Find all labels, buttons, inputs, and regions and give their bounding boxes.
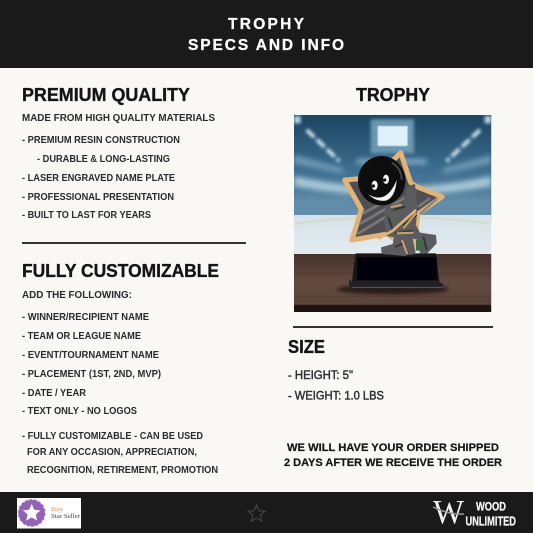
panel: size: [288, 337, 384, 402]
icon: purple badge: [19, 500, 45, 526]
customization list: - PLACEMENT (1ST, 2ND, MVP): [22, 369, 161, 380]
header title: TROPHY: [228, 16, 305, 33]
heading: size: SIZE: [288, 337, 325, 357]
customization list: - WINNER/RECIPIENT NAME: [22, 312, 149, 323]
icon: outlined star: [248, 505, 265, 521]
footer band: [0, 492, 533, 533]
usage note: FOR ANY OCCASION, APPRECIATION,: [27, 447, 197, 458]
star: [345, 153, 442, 252]
heading: premium quality: PREMIUM QUALITY: [22, 85, 190, 105]
heading: trophy: TROPHY: [356, 85, 430, 105]
trophy figure: [345, 153, 443, 288]
hockey player: [378, 184, 437, 256]
shipping notice: WE WILL HAVE YOUR ORDER SHIPPED: [287, 442, 499, 454]
badge text: [51, 506, 81, 520]
quality list: [22, 135, 180, 221]
wooden table: [294, 254, 491, 312]
quality list: - LASER ENGRAVED NAME PLATE: [22, 173, 175, 184]
header title: [188, 16, 344, 54]
logo wordmark: WOOD: [476, 500, 506, 514]
customization list: - TEAM OR LEAGUE NAME: [22, 331, 141, 342]
subheading: materials: MADE FROM HIGH QUALITY MATERIALS: [22, 113, 215, 124]
heading: fully customizable: FULLY CUSTOMIZABLE: [22, 261, 219, 281]
customization list: - TEXT ONLY - NO LOGOS: [22, 406, 137, 417]
height spec: - HEIGHT: 5": [288, 370, 353, 382]
quality list: - PREMIUM RESIN CONSTRUCTION: [22, 135, 180, 146]
quality list: - DURABLE & LONG-LASTING: [37, 154, 170, 165]
puck face: [358, 156, 405, 205]
quality list: - PROFESSIONAL PRESENTATION: [22, 192, 174, 203]
subheading: add the following: ADD THE FOLLOWING:: [22, 290, 132, 301]
wood unlimited logo: [433, 494, 516, 531]
weight spec: - WEIGHT: 1.0 LBS: [288, 390, 384, 402]
badge text: Star Seller: [51, 513, 81, 520]
header title: SPECS AND INFO: [188, 37, 344, 54]
etsy star seller badge: [17, 498, 81, 528]
trophy photo: [294, 115, 491, 312]
logo wordmark: [466, 500, 516, 528]
customization list: [22, 312, 161, 417]
trophy base: [349, 253, 443, 288]
panel: premium quality: [22, 85, 215, 221]
shipping notice: [284, 442, 502, 469]
quality list: - BUILT TO LAST FOR YEARS: [22, 210, 151, 221]
usage note: RECOGNITION, RETIREMENT, PROMOTION: [27, 465, 218, 476]
trophy shadow: [337, 284, 449, 294]
badge text: Etsy: [51, 506, 64, 513]
usage note: [22, 431, 218, 476]
header band: [0, 0, 533, 68]
customization list: - EVENT/TOURNAMENT NAME: [22, 350, 159, 361]
arena background: [294, 115, 491, 254]
shipping notice: 2 DAYS AFTER WE RECEIVE THE ORDER: [284, 457, 502, 469]
logo mark: W: [433, 494, 465, 531]
panel: fully customizable: [22, 261, 219, 476]
usage note: - FULLY CUSTOMIZABLE - CAN BE USED: [22, 431, 203, 442]
customization list: - DATE / YEAR: [22, 388, 87, 399]
